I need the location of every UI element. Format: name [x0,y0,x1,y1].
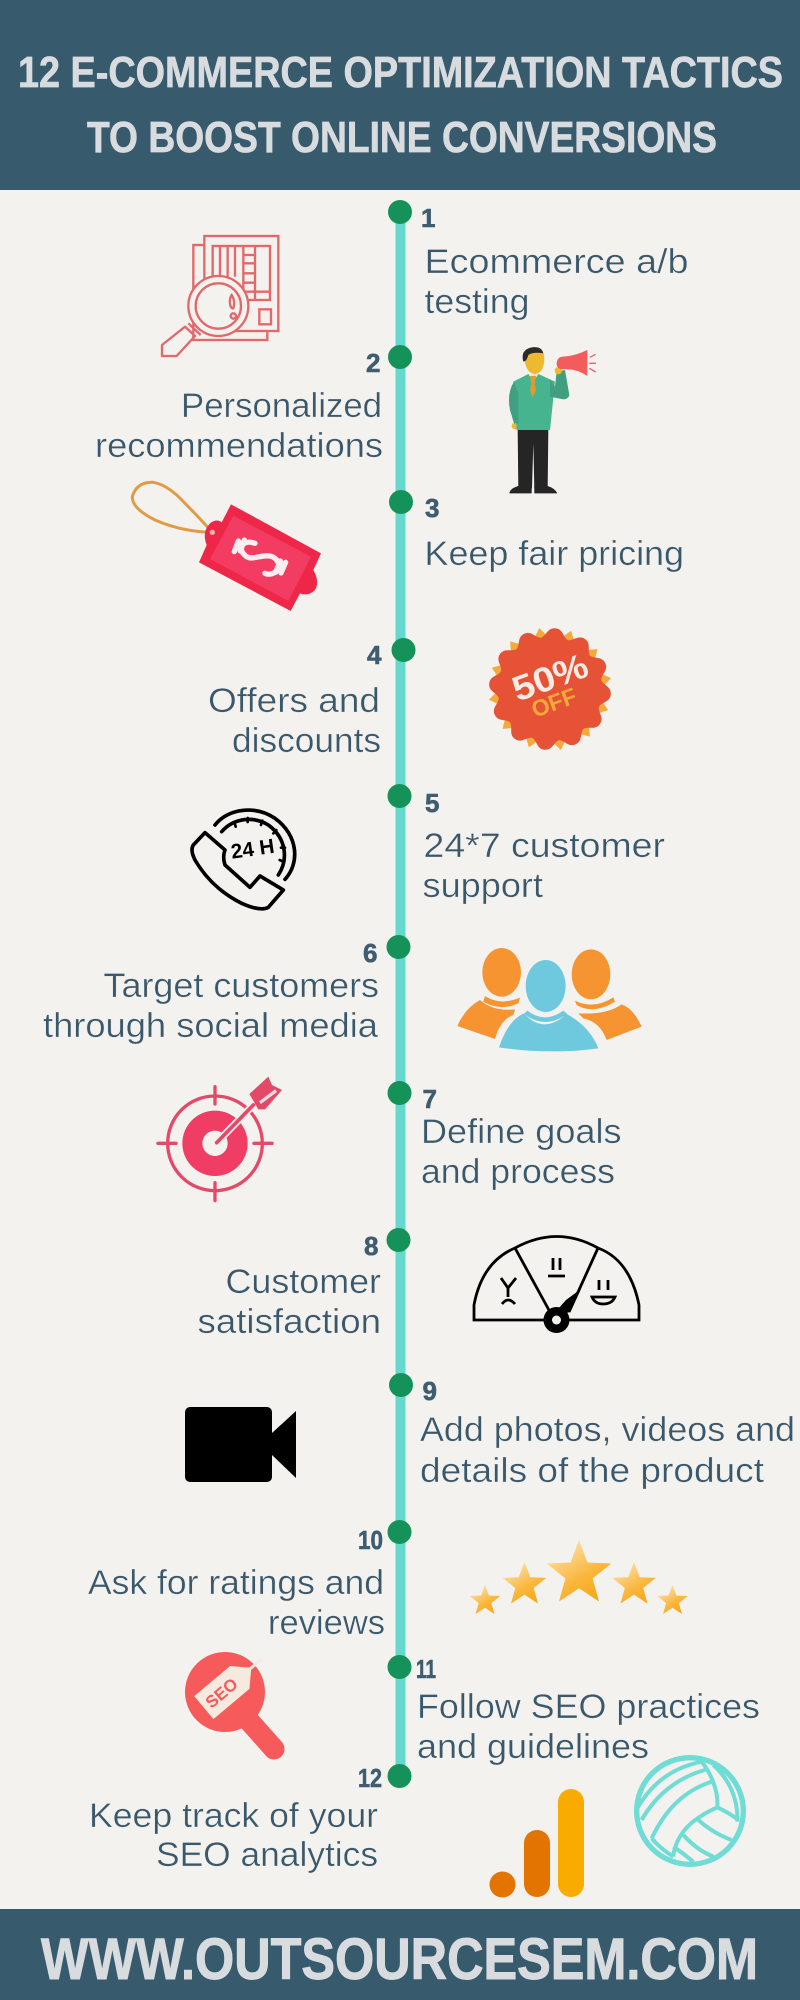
step 6 text: Target customers [104,967,379,1005]
step 5 text: 5 [425,788,439,818]
step 5 text: 24*7 customer [424,827,665,865]
step 7 text: and process [421,1153,615,1191]
step 10 text: reviews [268,1604,385,1642]
icon: 50% off badge: 50% [507,646,593,709]
step 8 text: 8 [364,1231,378,1261]
icon: SEO magnifier: SEO [202,1674,242,1712]
icon: group of people [457,948,642,1051]
header banner [0,0,800,190]
step 6 text: 6 [363,938,377,968]
step 4 text: Offers and [208,682,380,720]
step 7 text [421,1084,622,1191]
icon: 24h phone support [192,810,295,909]
icon: SEO magnifier [185,1648,274,1749]
step 2 text: Personalized [181,387,382,425]
step 12 text: SEO analytics [156,1836,378,1874]
icon: video camera [185,1407,296,1482]
icon: analytics bars [490,1789,584,1898]
step 2 text [95,348,383,465]
step 10 text: Ask for ratings and [88,1564,384,1602]
icon: satisfaction gauge [474,1236,639,1333]
timeline line [396,212,406,1776]
icon: volleyball [637,1758,743,1864]
step 4 text: 4 [367,640,382,670]
icon: five stars [470,1540,688,1614]
footer banner [0,1909,800,2000]
step 4 text [208,640,382,760]
step 10 text [88,1525,385,1642]
title [18,48,783,162]
step 6 text [43,938,379,1045]
step 12 text [89,1763,382,1874]
step 8 text [198,1231,381,1341]
step 3 text [424,493,684,573]
step 9 text: Add photos, videos and [420,1411,795,1449]
step 4 text: discounts [232,722,381,760]
step 1 text: testing [424,283,530,321]
step 9 text: details of the product [420,1452,765,1490]
icon: 24h phone support: 24 H [229,835,276,864]
step 9 text [420,1376,795,1490]
icon: 50% off badge: OFF [528,682,580,723]
step 5 text: support [422,867,544,905]
icon: 50% off badge [487,626,613,752]
step 7 text: 7 [422,1084,437,1114]
timeline dots [386,200,416,1788]
icon: price tag [132,482,321,611]
icon: man with megaphone [509,347,596,493]
step 3 text: Keep fair pricing [424,535,684,573]
step 2 text: recommendations [95,427,383,465]
step 10 text: 10 [358,1525,383,1555]
step 2 text: 2 [366,348,380,378]
step 8 text: satisfaction [198,1303,381,1341]
step 11 text [416,1654,760,1766]
icon: target with arrow [158,1077,282,1201]
icon: document under magnifier [162,236,278,356]
step 8 text: Customer [226,1263,381,1301]
step 12 text: 12 [358,1763,382,1793]
step 6 text: through social media [43,1007,378,1045]
step 11 text: 11 [416,1654,436,1684]
step 12 text: Keep track of your [89,1797,378,1835]
step 7 text: Define goals [421,1113,622,1151]
step 3 text: 3 [425,493,439,523]
step 1 text: Ecommerce a/b [424,243,688,281]
step 1 text [421,203,688,321]
step 11 text: Follow SEO practices [417,1688,760,1726]
step 1 text: 1 [421,203,435,233]
step 9 text: 9 [422,1376,437,1406]
step 11 text: and guidelines [417,1728,649,1766]
step 5 text [422,788,665,905]
